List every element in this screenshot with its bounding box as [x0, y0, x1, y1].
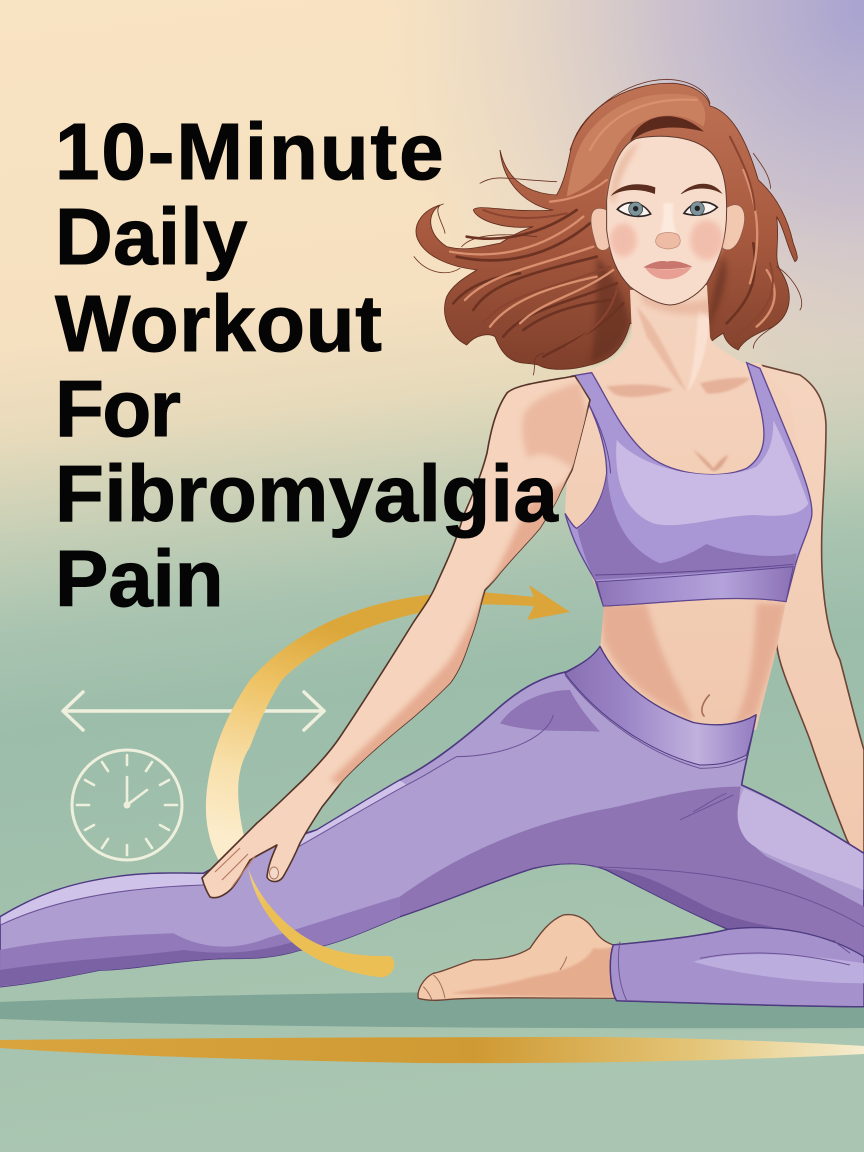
- title: Fibromyalgia: [55, 449, 558, 538]
- title: Daily: [55, 192, 248, 281]
- title: For: [55, 364, 180, 453]
- sports top: [565, 363, 812, 606]
- neck and collarbone shading: [607, 277, 750, 472]
- ears: [591, 205, 745, 250]
- face: [591, 136, 745, 305]
- hip shadow: [500, 690, 600, 732]
- waistband: [565, 647, 756, 765]
- shin: [610, 928, 864, 1007]
- gold arc lower segment: [248, 868, 394, 977]
- thigh inner dark: [600, 868, 773, 929]
- gold curved arrow: [206, 585, 570, 872]
- foot: [418, 915, 617, 1000]
- eyebrows: [611, 184, 723, 196]
- forehead hair shadow: [610, 142, 640, 203]
- neck and torso: [565, 285, 812, 730]
- title: Pain: [55, 534, 224, 623]
- face shape: [607, 136, 727, 305]
- leg lower shadow: [0, 897, 400, 987]
- icon: clock: [72, 750, 182, 860]
- leg top highlight: [1, 874, 203, 925]
- upper leg highlight strip: [277, 781, 407, 853]
- arm and shoulder shading: [330, 382, 600, 785]
- hand lines: [215, 848, 255, 887]
- arm and hand: [202, 376, 600, 898]
- shin highlight: [693, 954, 864, 983]
- lips: [643, 261, 692, 279]
- gold floor streak: [0, 1037, 864, 1063]
- nose: [656, 203, 680, 249]
- knee highlight: [738, 788, 863, 890]
- leggings: [0, 647, 864, 1007]
- right arm: [750, 365, 864, 870]
- thigh shadow: [400, 787, 864, 960]
- belly shading: [600, 603, 787, 725]
- hair: [414, 79, 802, 375]
- legging seams: [1, 675, 864, 1001]
- leg darkest strip: [0, 940, 300, 986]
- title: Workout: [55, 279, 382, 368]
- title: 10-Minute: [55, 107, 445, 196]
- right eye: [684, 202, 717, 216]
- left eye: [617, 202, 651, 216]
- icon: horizontal double arrow: [63, 692, 324, 730]
- ground shadow: [0, 990, 864, 1028]
- title: [55, 107, 558, 623]
- cheek blush: [610, 220, 723, 260]
